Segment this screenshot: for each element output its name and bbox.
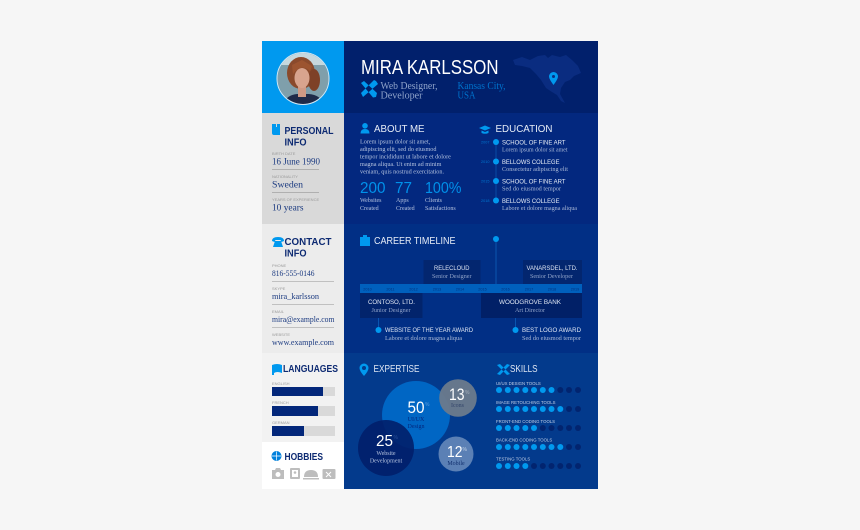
job: vanarsdel: Senior Developer	[530, 274, 573, 280]
birth date	[272, 151, 320, 168]
german bar: GERMAN	[272, 420, 290, 425]
panel: about and education	[344, 113, 598, 224]
email: EMAIL	[272, 309, 285, 314]
education entry 2018: 2018	[481, 199, 489, 203]
skill: testing tools: TESTING TOOLS	[496, 456, 530, 462]
icon: contact card	[290, 468, 300, 479]
circle: 13 percent	[439, 379, 477, 417]
education entry 2015: SCHOOL OF FINE ART	[502, 178, 566, 186]
heading: personal info	[284, 126, 334, 148]
icon: north america map	[513, 55, 581, 103]
circle: 25 percent: %	[394, 435, 398, 441]
icon: book	[272, 124, 280, 135]
heading: about me: ABOUT ME	[374, 123, 424, 135]
education entry 2015: 2015	[481, 180, 489, 184]
icon: location pin	[549, 72, 558, 85]
heading: hobbies: HOBBIES	[284, 452, 323, 463]
english bar: ENGLISH	[272, 381, 290, 386]
email	[272, 309, 335, 324]
award: best logo	[512, 318, 582, 342]
job: woodgrove	[481, 293, 582, 318]
education entry 2010: Consectetur adipiscing elit	[502, 167, 568, 173]
nationality	[272, 174, 303, 190]
skype	[272, 286, 320, 301]
panel: personal info	[262, 113, 344, 224]
education entry 2010: 2010	[481, 160, 489, 164]
nationality: NATIONALITY	[272, 174, 298, 179]
education entry 2007: Lorem ipsum dolor sit amet	[502, 148, 568, 154]
timeline bar: 2014	[456, 288, 464, 292]
timeline bar: 2018	[548, 288, 556, 292]
skill: front-end coding tools: FRONT-END CODING TOOLS	[496, 419, 555, 424]
icon: luggage	[322, 469, 336, 479]
award: best logo: Sed do eiusmod tempor	[522, 336, 581, 342]
skype: SKYPE	[272, 286, 286, 291]
job: contoso: Junior Designer	[372, 308, 411, 314]
icon: cloche	[303, 470, 319, 480]
education timeline	[481, 139, 577, 212]
skill: back-end coding tools	[496, 438, 581, 450]
skill: ui/ux design tools: UI/UX DESIGN TOOLS	[496, 381, 541, 386]
skill: front-end coding tools	[496, 419, 581, 431]
stat: websites	[360, 180, 386, 212]
about text: veniam, quis nostrud exercitation.	[360, 168, 444, 176]
circle: 12 percent: 12	[447, 444, 463, 461]
education entry 2015: Sed do eiusmod tempor	[502, 186, 561, 192]
education entry 2015	[481, 178, 566, 192]
circle: 50 percent	[382, 381, 450, 449]
stat: apps	[395, 180, 415, 212]
education entry 2010: BELLOWS COLLEGE	[502, 159, 560, 166]
years of experience: 10 years	[272, 204, 304, 214]
circle: 50 percent: UI/UX	[408, 417, 425, 423]
skill: ui/ux design tools	[496, 381, 581, 393]
job: woodgrove: Art Director	[515, 308, 545, 314]
about text: Lorem ipsum dolor sit amet,	[360, 138, 431, 146]
marker dot	[493, 236, 499, 242]
icon: graduation cap	[479, 126, 491, 134]
circle: 12 percent: Mobile	[447, 461, 465, 467]
job: contoso: CONTOSO, LTD.	[368, 299, 415, 306]
education entry 2010	[481, 158, 568, 173]
heading: career timeline: CAREER TIMELINE	[374, 235, 456, 247]
timeline bar: 2011	[386, 288, 395, 292]
years of experience: YEARS OF EXPERIENCE	[272, 197, 319, 202]
website: www.example.com	[272, 337, 334, 347]
heading: contact info: CONTACT	[284, 237, 332, 248]
job: vanarsdel	[523, 260, 582, 284]
circle: 25 percent: Development	[370, 458, 402, 464]
circle: 25 percent: Website	[376, 451, 396, 457]
phone	[272, 263, 314, 278]
circle: 12 percent: %	[462, 447, 468, 453]
education entry 2007: 2007	[481, 140, 489, 144]
icon: globe	[272, 451, 282, 461]
award: website of the year	[376, 318, 473, 342]
timeline bar	[360, 284, 582, 293]
heading: contact info: INFO	[284, 248, 307, 260]
panel: contact info	[262, 224, 344, 353]
icon: phone	[272, 237, 284, 247]
skill: back-end coding tools: BACK-END CODING TOOLS	[496, 438, 552, 442]
icon: head	[360, 364, 368, 376]
award: website of the year: WEBSITE OF THE YEAR AWARD	[385, 327, 473, 334]
venn chart	[358, 379, 477, 476]
education entry 2018: Labore et dolore magna aliqua	[502, 206, 577, 212]
stat: websites: Websites	[360, 198, 382, 204]
circle: 12 percent	[438, 436, 474, 472]
job: relecloud	[424, 260, 480, 284]
education entry 2007	[481, 139, 568, 154]
education entry 2018	[481, 198, 577, 212]
name: MIRA KARLSSON	[361, 57, 498, 79]
timeline bar: 2017	[525, 288, 533, 292]
job: contoso	[360, 293, 422, 318]
nationality: Sweden	[272, 180, 303, 190]
about text: magna aliqua. Ut enim ad minim	[360, 161, 442, 168]
icon: crossed tools	[497, 364, 510, 375]
circle: 50 percent: 50	[408, 398, 424, 417]
timeline bar: 2010	[363, 288, 372, 292]
timeline bar: 2012	[409, 288, 418, 292]
skill: testing tools	[496, 456, 581, 469]
stat: clients: Clients	[425, 198, 443, 204]
stat: clients: 100%	[425, 180, 462, 197]
heading: languages: LANGUAGES	[283, 364, 338, 375]
panel: hobbies	[262, 442, 344, 489]
stat: clients: Satisfactions	[425, 205, 456, 212]
job: relecloud: Senior Designer	[432, 274, 472, 280]
stat: websites: 200	[360, 180, 386, 197]
heading: personal info: PERSONAL	[284, 126, 334, 137]
icon: tools	[361, 80, 378, 98]
skill: image retouching tools	[496, 400, 581, 412]
stat: clients	[425, 180, 462, 212]
birth date: 16 June 1990	[272, 158, 320, 168]
heading: skills: SKILLS	[510, 363, 538, 375]
job title	[380, 81, 438, 102]
timeline bar: 2019	[571, 288, 579, 292]
heading: expertise: EXPERTISE	[374, 363, 420, 375]
circle: 13 percent: %	[465, 390, 470, 396]
location: USA	[458, 90, 476, 102]
panel: expertise and skills	[344, 353, 598, 489]
job: relecloud: RELECLOUD	[434, 265, 470, 272]
panel: career timeline	[344, 224, 598, 353]
website: WEBSITE	[272, 332, 290, 337]
circle: 50 percent: %	[425, 402, 430, 408]
panel: header	[344, 41, 598, 113]
circle: 25 percent	[358, 420, 414, 476]
job title: Web Designer,	[380, 81, 438, 92]
website	[272, 332, 334, 347]
icon: person	[360, 123, 370, 134]
timeline bar: 2013	[433, 288, 441, 292]
portrait photo	[277, 52, 329, 105]
stat: apps: Apps	[396, 198, 409, 204]
location	[458, 81, 506, 102]
panel: photo	[262, 41, 344, 113]
award: website of the year: Labore et dolore magna aliqua	[385, 336, 462, 342]
phone: 816-555-0146	[272, 268, 314, 278]
skill: image retouching tools: IMAGE RETOUCHING TOOLS	[496, 400, 556, 405]
heading: education: EDUCATION	[496, 123, 552, 135]
about text: adipiscing elit, sed do eiusmod	[360, 146, 437, 153]
birth date: BIRTH DATE	[272, 151, 296, 156]
circle: 13 percent: 13	[449, 385, 464, 404]
phone: PHONE	[272, 263, 287, 268]
icon: briefcase	[360, 235, 370, 246]
stat: apps: 77	[395, 180, 412, 197]
heading: personal info: INFO	[284, 138, 307, 148]
timeline bar: 2016	[501, 288, 510, 292]
job: vanarsdel: VANARSDEL, LTD.	[526, 265, 578, 272]
job: woodgrove: WOODGROVE BANK	[499, 299, 562, 306]
circle: 50 percent: Design	[408, 424, 424, 430]
job title: Developer	[380, 90, 423, 102]
icon: flag	[272, 364, 282, 375]
circle: 13 percent: Icons	[451, 403, 465, 409]
years of experience	[272, 197, 319, 214]
circle: 25 percent: 25	[376, 433, 393, 450]
award: best logo: BEST LOGO AWARD	[522, 327, 582, 334]
stat: apps: Created	[396, 206, 415, 212]
email: mira@example.com	[272, 314, 335, 324]
education entry 2007: SCHOOL OF FINE ART	[502, 140, 566, 146]
panel: languages	[262, 353, 344, 442]
icon: camera	[272, 468, 284, 479]
about text: tempor incididunt ut labore et dolore	[360, 154, 451, 160]
timeline bar: 2015	[478, 288, 487, 292]
location: Kansas City,	[458, 81, 506, 92]
stat: websites: Created	[360, 206, 379, 212]
skype: mira_karlsson	[272, 291, 320, 301]
heading: contact info	[284, 237, 332, 260]
french bar: FRENCH	[272, 400, 289, 405]
education entry 2018: BELLOWS COLLEGE	[502, 198, 560, 205]
